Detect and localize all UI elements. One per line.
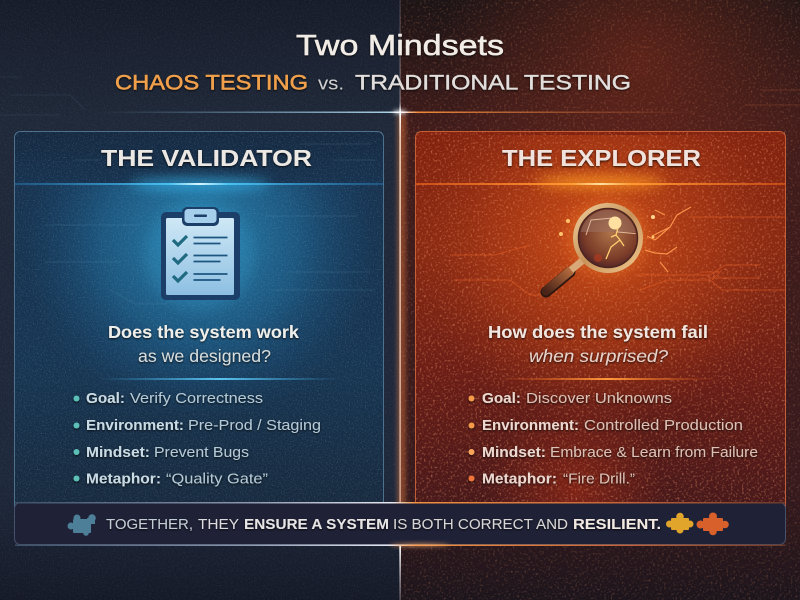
statement text: THEY — [198, 516, 239, 533]
bullet item: goal: Verify Correctness — [130, 390, 263, 407]
icon: blue puzzle piece — [68, 514, 96, 536]
glowing header line — [15, 178, 383, 190]
subtitle: chaos testing vs traditional testing: vs. — [318, 74, 344, 94]
question: how does the system fail: when surprised? — [529, 346, 668, 366]
bullet item: goal: Goal: — [482, 390, 521, 407]
statement text: RESILIENT. — [573, 516, 661, 533]
banner: together statement — [14, 502, 786, 546]
bullet item: goal — [468, 390, 672, 407]
statement text: ENSURE A SYSTEM — [244, 516, 389, 533]
icon: clipboard with checklist — [145, 201, 255, 311]
list: explorer attributes — [468, 390, 758, 488]
question: does the system work — [108, 322, 299, 366]
subtitle: chaos testing vs traditional testing — [115, 72, 631, 94]
bullet item: environment — [468, 417, 743, 434]
bullet item: mindset — [74, 444, 249, 461]
icon: magnifying glass over cracks — [546, 198, 691, 292]
statement text: TOGETHER, — [106, 516, 193, 533]
icon: yellow and orange puzzle pieces — [666, 512, 729, 535]
heading: the validator: THE VALIDATOR — [101, 145, 312, 171]
glowing header line — [416, 175, 785, 189]
bullet item: mindset — [468, 444, 758, 461]
title: two mindsets: Two Mindsets — [296, 30, 504, 62]
subtitle: chaos testing vs traditional testing: TRADITIONAL TESTING — [355, 72, 631, 94]
bullet item: metaphor: “Fire Drill.” — [563, 470, 635, 488]
bullet item: metaphor: “Quality Gate” — [166, 470, 268, 488]
bullet item: goal: Discover Unknowns — [526, 390, 672, 407]
bullet item: metaphor — [468, 470, 635, 488]
bullet item: environment: Controlled Production — [584, 417, 743, 434]
heading: the explorer: THE EXPLORER — [502, 145, 701, 171]
bullet item: mindset: Embrace & Learn from Failure — [550, 444, 758, 461]
bullet item: environment: Pre-Prod / Staging — [188, 417, 321, 434]
center divider line — [397, 0, 406, 600]
bullet item: mindset: Mindset: — [482, 444, 546, 461]
bullet item: mindset: Mindset: — [86, 444, 150, 461]
bullet item: metaphor: Metaphor: — [86, 470, 161, 488]
question: does the system work: as we designed? — [138, 346, 271, 366]
statement text: IS BOTH CORRECT AND — [393, 516, 568, 533]
bullet item: goal — [74, 390, 263, 407]
bullet item: environment — [74, 417, 321, 434]
subtitle: chaos testing vs traditional testing: CHAOS TESTING — [115, 72, 308, 94]
bullet item: goal: Goal: — [86, 390, 125, 407]
question: does the system work: Does the system work — [108, 322, 299, 342]
horizontal flare under title — [100, 110, 700, 114]
question: how does the system fail — [488, 322, 708, 366]
question: how does the system fail: How does the system fail — [488, 322, 708, 342]
bullet item: environment: Environment: — [86, 417, 184, 434]
list: validator attributes — [74, 390, 321, 488]
panel: the validator — [14, 132, 384, 516]
panel: the explorer — [416, 132, 786, 516]
bullet item: metaphor — [74, 470, 268, 488]
statement text — [106, 516, 661, 533]
bullet item: environment: Environment: — [482, 417, 579, 434]
bullet item: mindset: Prevent Bugs — [154, 444, 249, 461]
bullet item: metaphor: Metaphor: — [482, 470, 557, 488]
